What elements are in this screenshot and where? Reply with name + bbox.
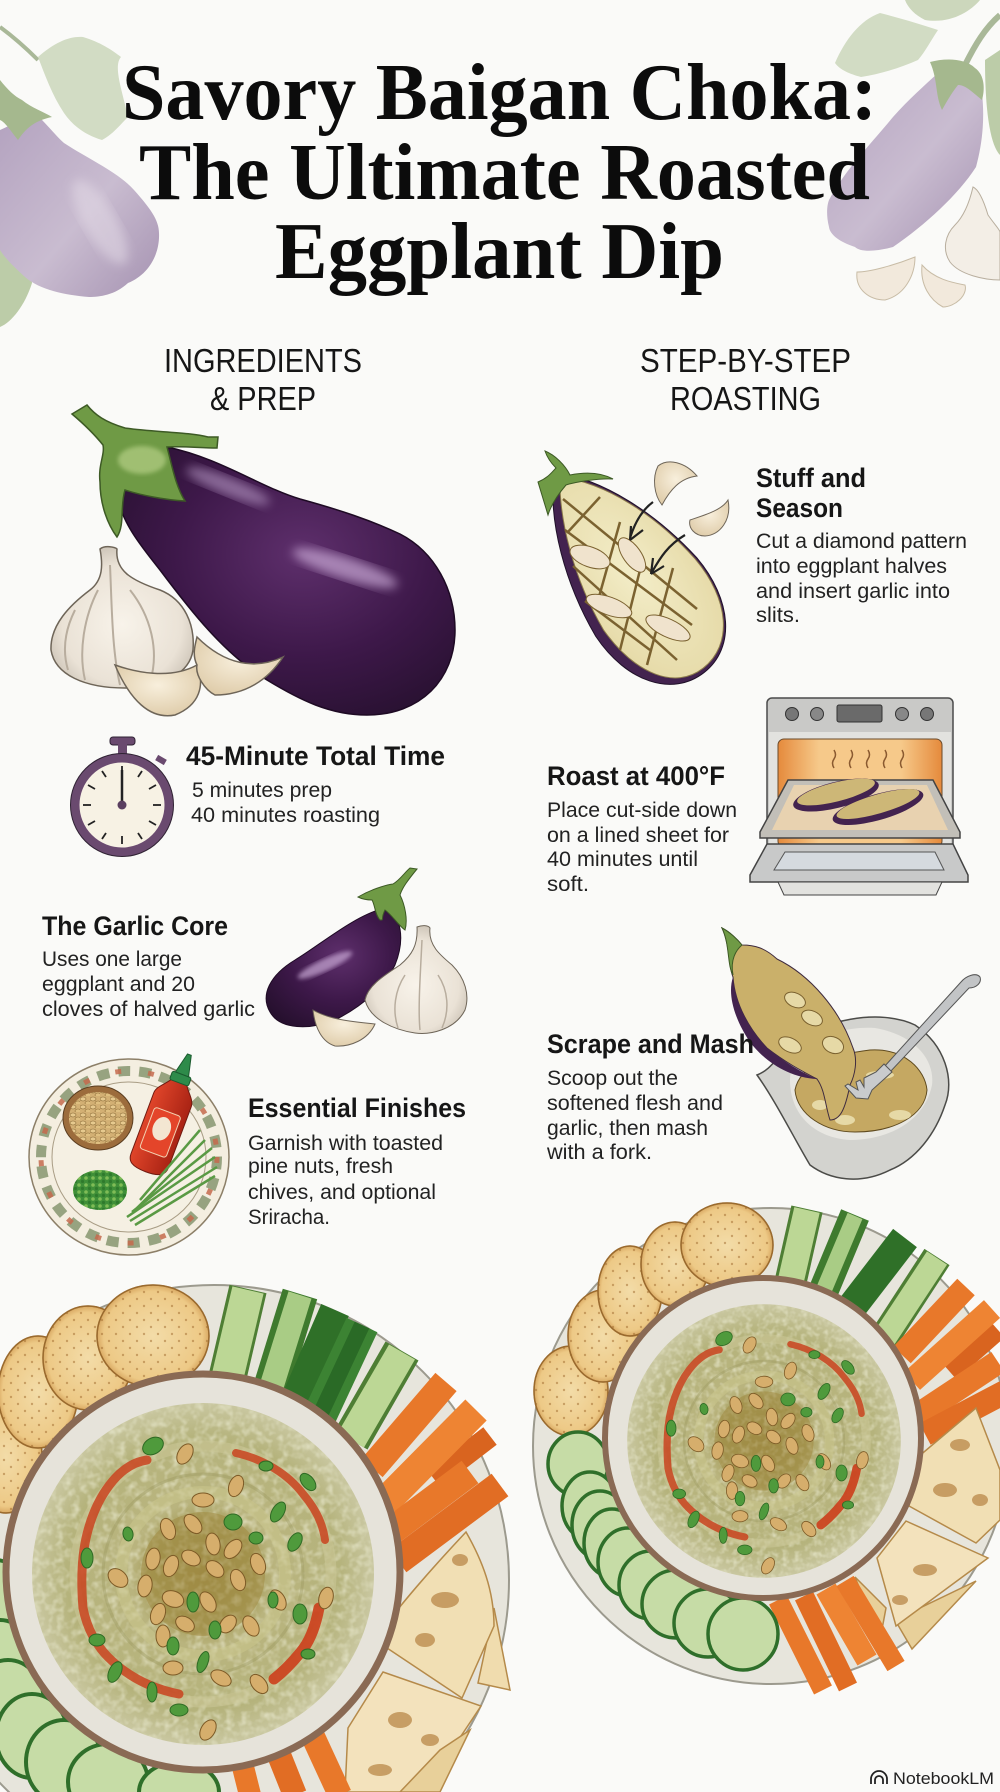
plate [533, 1208, 1000, 1684]
dip bowl [605, 1278, 921, 1598]
heading: step-by-step roasting: STEP-BY-STEP [640, 342, 851, 379]
heading: step-by-step roasting: ROASTING [670, 380, 821, 417]
dip bowl [6, 1374, 400, 1770]
title: Savory Baigan Choka: [122, 49, 877, 137]
text: 45-minute total time [186, 741, 445, 827]
text: the garlic core: Uses one large [42, 948, 182, 971]
text: essential finishes: Essential Finishes [248, 1093, 466, 1123]
heading: ingredients and prep: INGREDIENTS [164, 342, 362, 379]
text: the garlic core [42, 911, 255, 1021]
text: the garlic core: The Garlic Core [42, 911, 228, 941]
title: Eggplant Dip [275, 208, 724, 296]
text: roast at 400°F: Place cut-side down [547, 799, 737, 822]
icon: bowl with scooped eggplant and fork [722, 928, 980, 1179]
decoration: top right eggplant, leaves and garlic [827, 0, 1000, 307]
carrots [902, 1287, 1000, 1434]
decoration: top left eggplant and leaves [0, 27, 159, 327]
heading: step-by-step roasting [640, 342, 851, 417]
icon: small eggplant with garlic [266, 868, 467, 1046]
text: the garlic core: eggplant and 20 [42, 973, 195, 996]
text: essential finishes: chives, and optional [248, 1181, 436, 1204]
title [122, 49, 877, 296]
heading: ingredients and prep [164, 342, 362, 417]
text: stuff and season: and insert garlic into [756, 580, 950, 603]
text: scrape and mash: Scoop out the [547, 1067, 678, 1090]
carrots at bottom [240, 1730, 340, 1792]
text: scrape and mash: with a fork. [546, 1141, 652, 1164]
text: stuff and season: into eggplant halves [756, 555, 947, 578]
text: roast at 400°F: on a lined sheet for [547, 824, 729, 847]
text: stuff and season [756, 463, 967, 627]
baigan choka dip [32, 1403, 374, 1745]
text: stuff and season: Cut a diamond pattern [756, 530, 967, 553]
text: roast at 400°F [547, 761, 737, 896]
text: essential finishes: Sriracha. [248, 1206, 330, 1229]
text: essential finishes: pine nuts, fresh [248, 1155, 393, 1178]
heading: ingredients and prep: & PREP [210, 380, 316, 417]
icon: oven with roasting eggplant [750, 698, 968, 895]
logo: NotebookLM: NotebookLM [893, 1769, 994, 1788]
carrots [372, 1382, 500, 1561]
text: essential finishes: Garnish with toasted [248, 1132, 443, 1155]
cucumber sticks [791, 1209, 937, 1340]
carrots at bottom [778, 1581, 896, 1690]
cucumber slices [0, 1560, 219, 1792]
crackers [0, 1285, 209, 1513]
text: scrape and mash: garlic, then mash [547, 1117, 708, 1140]
pita wedges [855, 1408, 1000, 1649]
icon: plate of garnishes [29, 1048, 229, 1255]
pita wedges [345, 1532, 510, 1792]
text: roast at 400°F: soft. [547, 873, 589, 896]
illustration: left dip platter [0, 1285, 510, 1792]
text: stuff and season: Stuff and [756, 463, 866, 493]
text: scrape and mash: Scrape and Mash [547, 1029, 754, 1059]
title: The Ultimate Roasted [139, 129, 870, 217]
illustration: right dip platter [533, 1203, 1000, 1690]
text: scrape and mash: softened flesh and [547, 1092, 723, 1115]
text: 45-minute total time: 5 minutes prep [192, 779, 332, 802]
text: roast at 400°F: 40 minutes until [547, 848, 698, 871]
text: 45-minute total time: 40 minutes roasting [191, 804, 380, 827]
text: roast at 400°F: Roast at 400°F [547, 761, 725, 791]
text: 45-minute total time: 45-Minute Total Time [186, 741, 445, 771]
text: essential finishes [248, 1093, 466, 1229]
cucumber slices [548, 1432, 778, 1670]
icon: halved eggplant with garlic and arrows [500, 435, 755, 712]
icon: stopwatch [70, 737, 174, 856]
crackers [534, 1203, 773, 1436]
cucumber sticks [228, 1289, 402, 1440]
icon: large eggplant with garlic [51, 405, 455, 716]
text: stuff and season: Season [756, 493, 843, 523]
text: the garlic core: cloves of halved garlic [42, 998, 255, 1021]
plate [0, 1285, 509, 1792]
text: stuff and season: slits. [756, 604, 800, 627]
text: scrape and mash [546, 1029, 754, 1164]
baigan choka dip [627, 1304, 901, 1578]
